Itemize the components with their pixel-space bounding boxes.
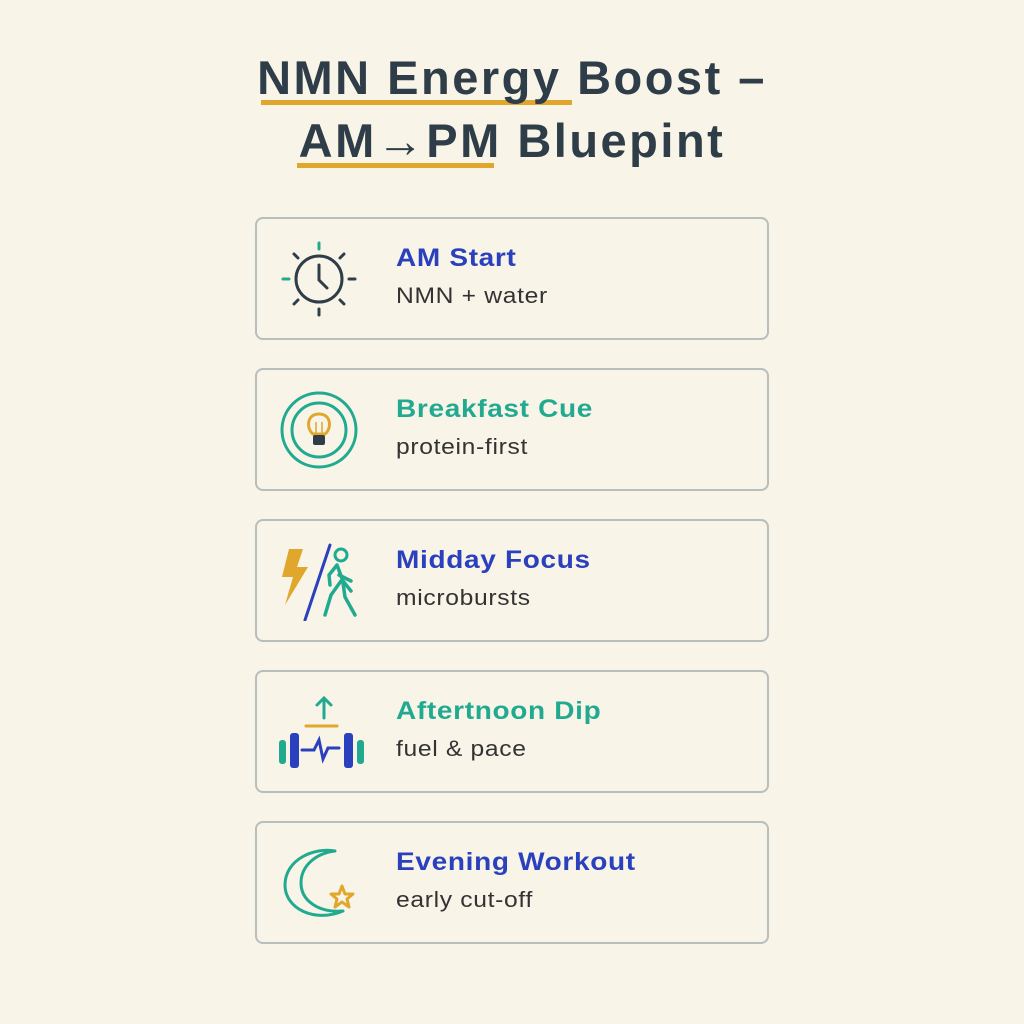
- panel: Evening Workout: Evening Workout: [396, 848, 636, 876]
- icon: sun clock: [282, 242, 356, 316]
- panel: Afternoon Dip: Aftertnoon Dip: [396, 697, 601, 725]
- panel: AM Start: NMN + water: [396, 283, 548, 308]
- text: NMN Energy Boost –: [257, 51, 767, 104]
- panel: AM Start: AM Start: [396, 244, 517, 272]
- panel: Midday Focus: microbursts: [396, 585, 531, 610]
- panel: Afternoon Dip: [255, 670, 769, 793]
- title: [257, 51, 767, 168]
- icon: dumbbell pulse: [279, 696, 364, 768]
- panel: Breakfast Cue: [255, 368, 769, 491]
- panel: AM Start: [255, 217, 769, 340]
- text: AM→PM Bluepint: [299, 114, 725, 167]
- panel: Afternoon Dip: fuel & pace: [396, 736, 527, 761]
- icon: moon and star: [284, 848, 354, 917]
- panel: Evening Workout: [255, 821, 769, 944]
- icon: bulb: [280, 392, 358, 468]
- panel: Breakfast Cue: Breakfast Cue: [396, 395, 593, 423]
- icon: bolt and walker: [282, 544, 357, 621]
- panel: Midday Focus: Midday Focus: [396, 546, 591, 574]
- panel: Midday Focus: [255, 519, 769, 642]
- panel: Breakfast Cue: protein-first: [396, 434, 528, 459]
- panel: Evening Workout: early cut-off: [396, 887, 533, 912]
